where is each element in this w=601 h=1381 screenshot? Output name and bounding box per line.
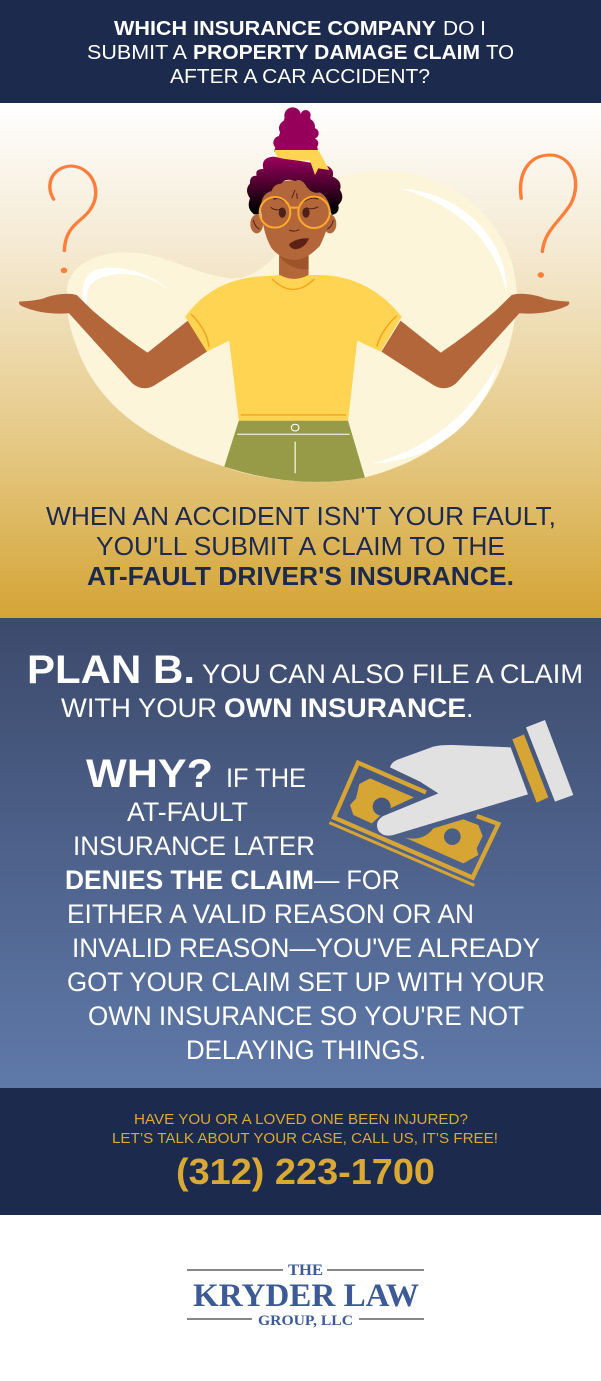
- logo: The Kryder Law Group: [187, 1262, 424, 1329]
- text block: at-fault statement: YOU'LL SUBMIT A CLAIM TO THE: [96, 531, 505, 561]
- text block: why: [65, 752, 545, 1065]
- text block: why: — FOR: [314, 865, 400, 895]
- logo: The Kryder Law Group: THE: [288, 1262, 323, 1279]
- text block: why: EITHER A VALID REASON OR AN: [67, 899, 474, 929]
- text block: call to action: [112, 1111, 498, 1147]
- title: TO: [486, 42, 514, 64]
- text block: why: GOT YOUR CLAIM SET UP WITH YOUR: [67, 967, 545, 997]
- text block: at-fault statement: AT-FAULT DRIVER'S INSURANCE.: [87, 561, 514, 591]
- text block: why: WHY?: [86, 752, 213, 796]
- text block: why: INVALID REASON—YOU'VE ALREADY: [72, 933, 540, 963]
- text block: call to action: LET’S TALK ABOUT YOUR CASE, CALL US, IT’S FREE!: [112, 1130, 498, 1147]
- text block: at-fault statement: WHEN AN ACCIDENT ISN'T YOUR FAULT,: [46, 501, 556, 531]
- panel: plan B: [0, 618, 601, 1088]
- title: PROPERTY DAMAGE CLAIM: [193, 42, 480, 64]
- icon: right question mark: [521, 155, 576, 276]
- text block: why: OWN INSURANCE SO YOU'RE NOT: [88, 1001, 524, 1031]
- text block: at-fault statement: [46, 501, 556, 591]
- hair band: [274, 150, 329, 175]
- illustration: shrugging woman: [19, 107, 576, 482]
- text block: why: DENIES THE CLAIM: [65, 865, 314, 895]
- text block: why: IF THE: [226, 763, 306, 793]
- text block: why: AT-FAULT: [127, 797, 248, 827]
- head: [247, 157, 342, 260]
- heading: plan B: YOU CAN ALSO FILE A CLAIM: [202, 659, 583, 689]
- background blob: [67, 171, 517, 482]
- heading: plan B: [27, 648, 583, 723]
- logo: The Kryder Law Group: GROUP, LLC: [258, 1313, 353, 1329]
- phone number: (312) 223-1700: [176, 1151, 435, 1192]
- text block: why: INSURANCE LATER: [73, 831, 315, 861]
- panel: illustration and at-fault statement: [0, 103, 601, 618]
- heading: plan B: OWN INSURANCE: [224, 693, 466, 723]
- icon: left question mark: [50, 166, 96, 272]
- text block: call to action: HAVE YOU OR A LOVED ONE BEEN INJURED?: [134, 1111, 468, 1128]
- title: AFTER A CAR ACCIDENT?: [170, 66, 430, 88]
- text block: why: DELAYING THINGS.: [186, 1035, 426, 1065]
- title: SUBMIT A: [87, 42, 188, 64]
- icon: hand and money: [329, 720, 573, 885]
- title: DO I: [443, 18, 486, 40]
- hair bun: [273, 107, 319, 152]
- title: [87, 18, 514, 88]
- title: WHICH INSURANCE COMPANY: [114, 18, 437, 40]
- heading: plan B: WITH YOUR: [61, 693, 217, 723]
- body: [19, 252, 569, 482]
- heading: plan B: .: [466, 693, 474, 723]
- header band: [0, 0, 601, 103]
- panel: call to action: [0, 1088, 601, 1215]
- heading: plan B: PLAN B.: [27, 648, 195, 692]
- logo: The Kryder Law Group: KRYDER LAW: [193, 1278, 419, 1314]
